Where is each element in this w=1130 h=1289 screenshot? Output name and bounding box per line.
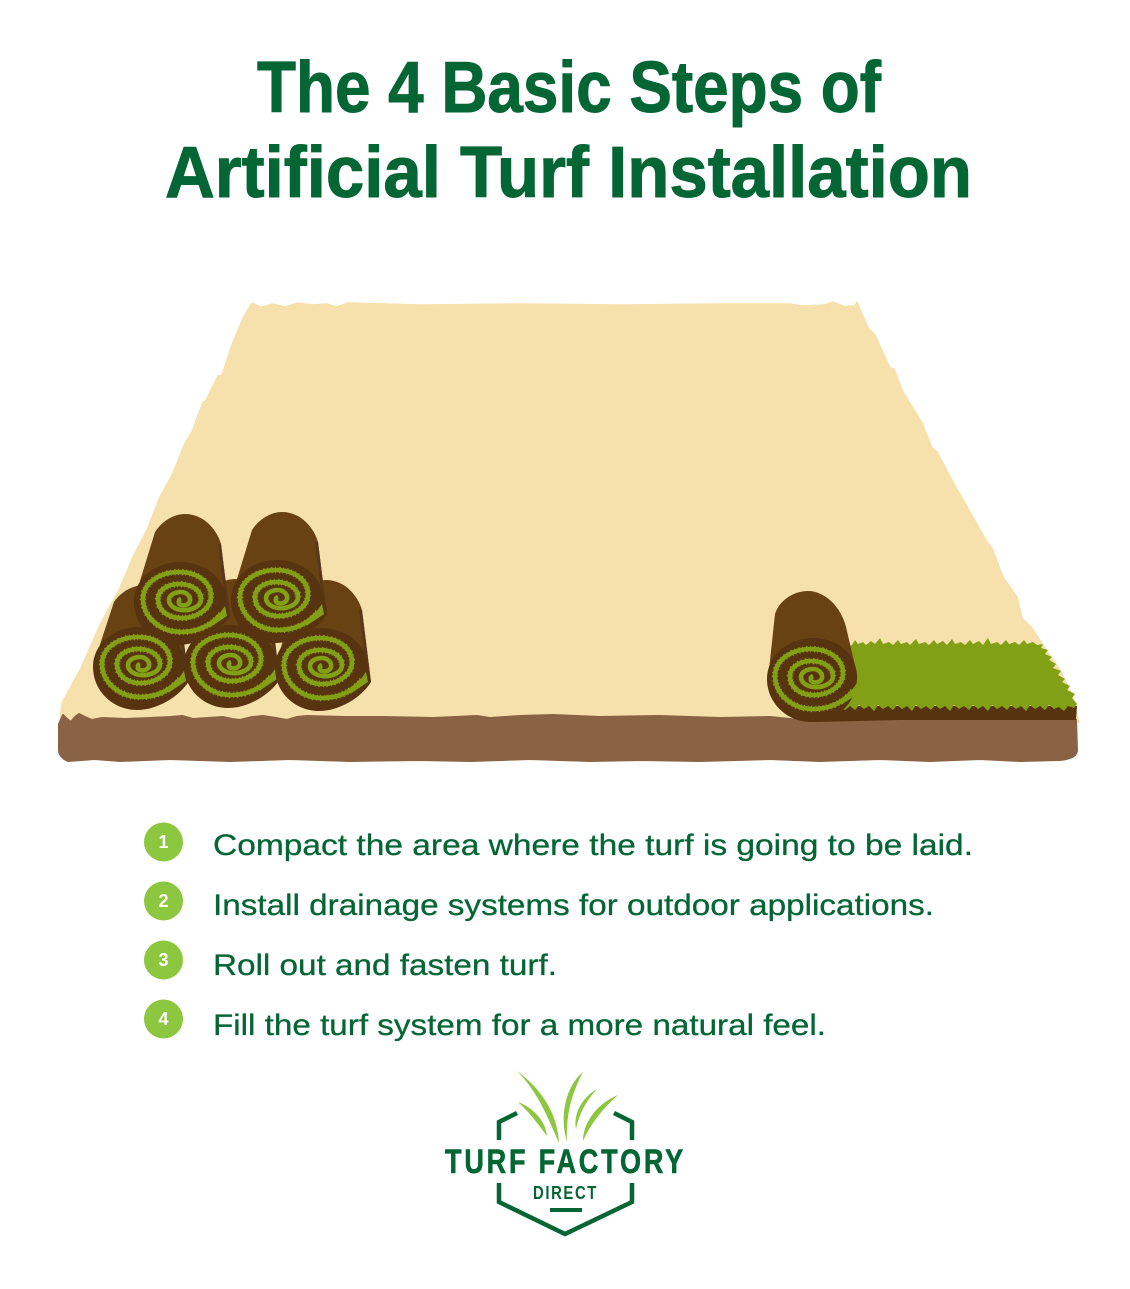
turf grass surface [815, 638, 1077, 712]
step 2: Install drainage systems for outdoor applications. [213, 889, 934, 922]
step 1 [144, 822, 973, 862]
step 1: 1 [158, 832, 169, 852]
compacted sand base [60, 302, 1079, 722]
step 4: Fill the turf system for a more natural feel. [213, 1009, 826, 1042]
soil ground strip [59, 714, 1077, 761]
step 3: 3 [158, 950, 169, 970]
logo: Turf Factory Direct: DIRECT [533, 1182, 598, 1203]
title [165, 48, 972, 213]
steps list [144, 822, 973, 1042]
logo: Turf Factory Direct [445, 1071, 686, 1234]
step 4 [144, 1000, 826, 1042]
step 3 [144, 940, 557, 982]
step 4: 4 [158, 1009, 169, 1029]
icon: unrolling turf roll [767, 591, 859, 722]
logo hexagon frame [499, 1113, 632, 1234]
step 2: 2 [158, 891, 169, 911]
icon: stack of turf rolls [93, 512, 371, 711]
step 1: Compact the area where the turf is going to be laid. [213, 829, 973, 862]
step 2 [144, 882, 934, 922]
title: The 4 Basic Steps of [257, 48, 882, 128]
unrolled turf strip [815, 638, 1077, 722]
logo wordmark: TURF FACTORY [445, 1143, 686, 1181]
logo grass blades [517, 1071, 618, 1143]
turf soil backing [815, 706, 1077, 722]
title: Artificial Turf Installation [165, 133, 972, 213]
step 3: Roll out and fasten turf. [213, 949, 557, 982]
